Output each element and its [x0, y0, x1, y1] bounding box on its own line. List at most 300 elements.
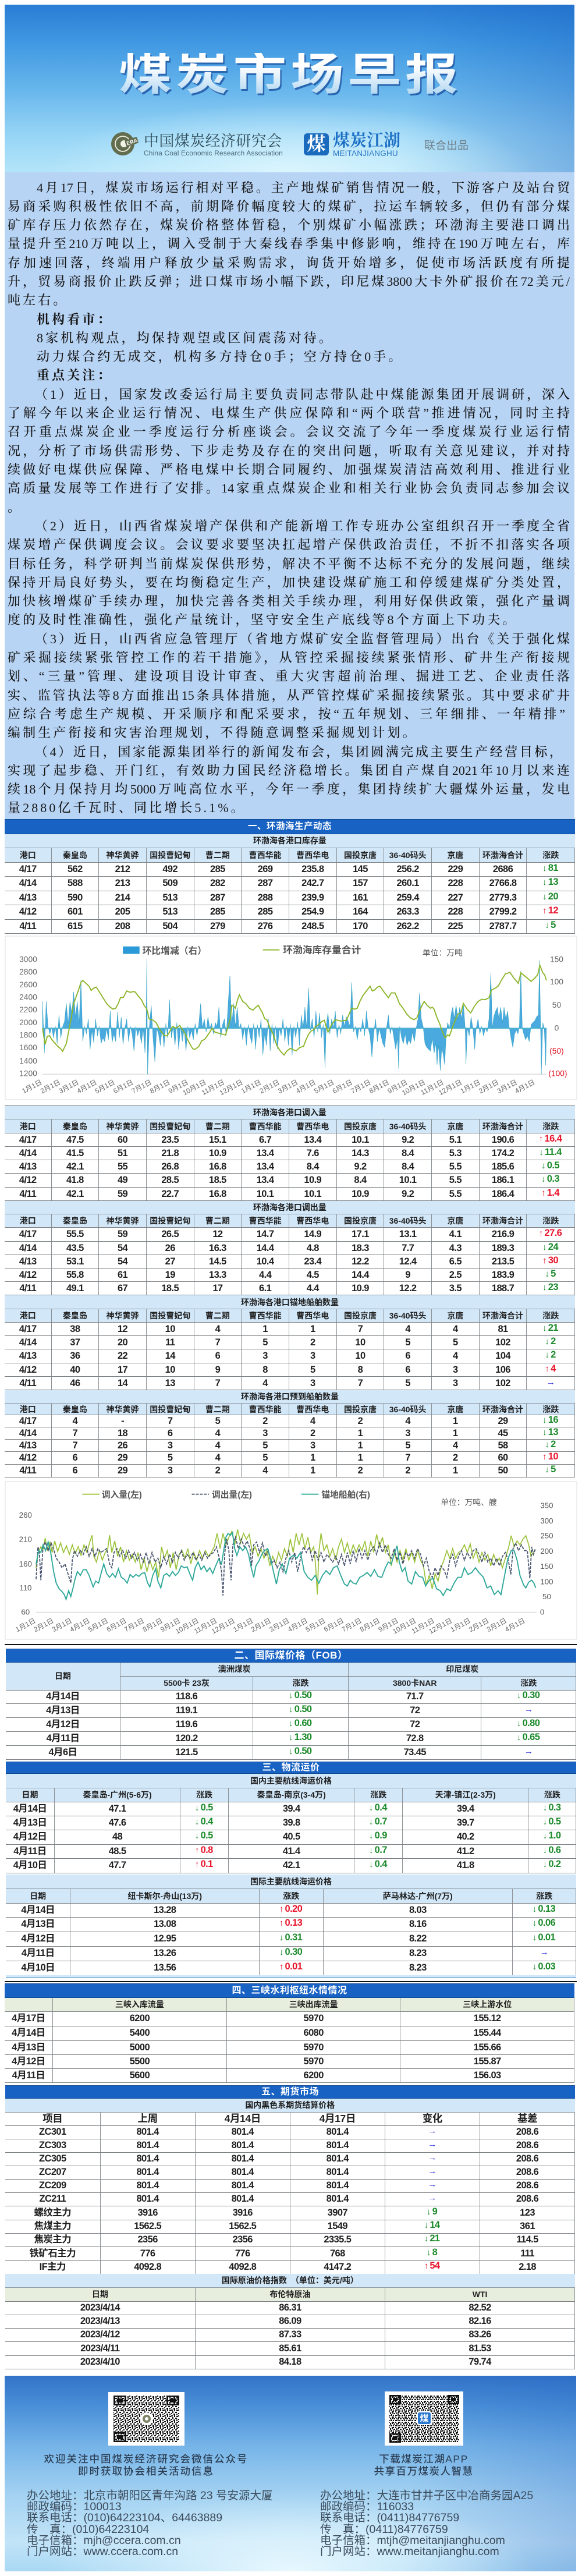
table: port flows and vessels: 13: [165, 1378, 175, 1388]
chart axes labels: 100: [540, 1577, 553, 1586]
organisation name: China Coal Economic Research Association: [144, 149, 283, 157]
table: international shipping prices: 12.95: [154, 1933, 176, 1944]
table: black-series futures: 9: [432, 2206, 437, 2217]
table: Three Gorges data: 5600: [130, 2070, 150, 2081]
table: port flows and vessels: 8.4: [354, 1175, 367, 1185]
table: port inventory: 环渤海合计: [482, 850, 523, 859]
table: port flows and vessels: 9: [215, 1365, 220, 1375]
text block: item 1: 。: [8, 500, 20, 515]
table: port flows and vessels: 0.3: [547, 1174, 559, 1184]
table: port flows and vessels: 4/14: [19, 1337, 37, 1348]
table: port flows and vessels: 4: [262, 1378, 268, 1388]
table: port flows and vessels: 2: [310, 1337, 315, 1348]
table: port inventory: 242.7: [301, 878, 324, 888]
table: port flows and vessels: ↑: [545, 1364, 549, 1374]
chart x axis months: 4月1日: [76, 1078, 98, 1095]
table: port flows and vessels: 3: [310, 1351, 315, 1361]
table: international shipping prices: 8.22: [409, 1933, 427, 1944]
table: port flows and vessels: 30: [548, 1255, 558, 1266]
table: port flows and vessels: 4: [405, 1416, 410, 1426]
text block: item 1: [8, 387, 570, 515]
table: port flows and vessels: 曹西华电: [296, 1121, 329, 1131]
table: black-series futures: 上周: [138, 2113, 158, 2124]
chart legend: [82, 1490, 497, 1507]
table: port flows and vessels: 4: [551, 1363, 556, 1374]
chart x axis months: 4月1日: [286, 1617, 309, 1634]
chart x axis months: 6月1日: [112, 1078, 134, 1095]
table: port inventory: 227: [448, 892, 463, 903]
table: port flows and vessels: 10.1: [352, 1135, 369, 1145]
table: crude oil index: 86.09: [279, 2316, 301, 2326]
table: FOB prices: 1.30: [294, 1732, 311, 1742]
table: port inventory: 214: [115, 892, 130, 903]
table: FOB prices: 119.1: [176, 1705, 197, 1716]
text block: item 1: 高质量发展等工作进行了安排。14家重点煤炭企业和相关行业协会负责同志参加会议: [8, 481, 570, 495]
table: domestic shipping prices: 0.7: [375, 1816, 387, 1827]
chart plot: [42, 958, 546, 1074]
table: FOB prices: 4月13日: [46, 1705, 80, 1716]
table: port flows and vessels: 189.3: [492, 1243, 514, 1253]
table: port flows and vessels: 10.1: [304, 1189, 321, 1199]
table: port flows and vessels: 26: [118, 1440, 127, 1451]
table: port flows and vessels: 104: [495, 1351, 510, 1361]
table: international shipping prices: →: [540, 1947, 549, 1957]
table: port flows and vessels: 曹二期: [205, 1311, 230, 1320]
table: port flows and vessels: 2: [551, 1336, 556, 1347]
table: port flows and vessels: 曹西华能: [249, 1404, 282, 1413]
table: domestic shipping prices: 0.4: [201, 1816, 213, 1827]
table: port flows and vessels: 5: [262, 1440, 268, 1451]
table: black-series futures: 3916: [137, 2208, 158, 2218]
table: port inventory: 涨跌: [542, 850, 559, 859]
chart x axis months: 3月1日: [51, 1617, 73, 1634]
table: port inventory: 曹西华能: [249, 850, 282, 859]
table: port flows and vessels: 1: [262, 1324, 268, 1334]
text block: CCERA contact details: 联系电话：(010)64223104、64463889: [27, 2511, 222, 2524]
text block: item 2: [8, 519, 570, 627]
table: port flows and vessels: 3: [310, 1440, 315, 1451]
table: port inventory: 276: [258, 921, 272, 931]
table: port flows and vessels: 神华黄骅: [107, 1121, 139, 1131]
table: port flows and vessels: 4/12: [19, 1452, 37, 1463]
text block: market overview: 升，贸易商报价止跌反弹；进口煤市场小幅下跌，印尼煤3800大卡外矿报价在72美元/: [8, 274, 570, 289]
table: port flows and vessels: 26.8: [161, 1161, 179, 1172]
table: Three Gorges data: 5970: [304, 2013, 324, 2024]
table: port flows and vessels: 曹西华能: [249, 1311, 282, 1320]
table: port flows and vessels: 5.5: [449, 1161, 462, 1172]
chart x axis months: 3月1日: [268, 1617, 290, 1634]
table: port flows and vessels: 4: [453, 1440, 458, 1451]
table: port inventory: 205: [115, 906, 130, 917]
table: port flows and vessels: 10: [165, 1365, 175, 1375]
table: black-series futures: 776: [235, 2248, 250, 2259]
section heading: futures market: 五、期货市场: [261, 2087, 319, 2097]
table: domestic shipping prices: 国内主要航线海运价格: [250, 1776, 332, 1785]
table: port flows and vessels: 55: [118, 1161, 127, 1172]
text block: item 3: （3）近日，山西省应急管理厅（省地方煤矿安全监督管理局）出台《关于强化煤: [35, 632, 570, 646]
table: port flows and vessels: 5: [405, 1337, 410, 1348]
chart axes labels: 50: [542, 1592, 551, 1601]
table: port inventory: 248.5: [301, 921, 324, 931]
table: black-series futures: 2356: [137, 2234, 158, 2245]
table: port flows and vessels: 秦皇岛: [63, 1216, 87, 1225]
table: domestic shipping prices: 涨跌: [370, 1790, 386, 1799]
table: port flows and vessels: 58: [498, 1440, 508, 1451]
table: port inventory: 161: [353, 892, 368, 903]
table: port flows and vessels: 185.6: [492, 1161, 514, 1172]
table: domestic shipping prices: 39.4: [457, 1803, 474, 1814]
text block: CCERA contact details: 门户网站：www.ccera.com.cn: [27, 2545, 178, 2558]
chart x axis months: 4月1日: [69, 1617, 91, 1634]
table: port flows and vessels: 4: [215, 1428, 220, 1438]
table: port flows and vessels: 5.1: [449, 1135, 462, 1145]
table: crude oil index: 83.26: [469, 2329, 491, 2340]
table: port flows and vessels: 14: [165, 1351, 175, 1361]
chart x axis months: 9月1日: [386, 1078, 409, 1095]
table: domestic shipping prices: 48: [112, 1831, 122, 1842]
table: international shipping prices: 0.30: [285, 1947, 302, 1957]
table: international shipping prices: 0.31: [285, 1932, 302, 1943]
table: domestic shipping prices: ↓: [543, 1859, 547, 1869]
table: port flows and vessels: 10.1: [257, 1189, 274, 1199]
table: FOB prices: 5500卡 23灰: [164, 1678, 210, 1688]
table: port flows and vessels: 4/14: [19, 1148, 37, 1158]
chart x axis months: 9月1日: [167, 1078, 190, 1095]
table: black-series futures: 208.6: [516, 2140, 538, 2150]
table: international shipping prices: 0.01: [285, 1961, 302, 1972]
table: port flows and vessels: 29: [118, 1465, 127, 1476]
table: port inventory: 2799.2: [489, 906, 516, 917]
table: black-series futures: 208.6: [516, 2127, 538, 2137]
chart x axis months: 3月1日: [496, 1078, 519, 1095]
table: port flows and vessels: 36-40码头: [389, 1311, 427, 1320]
table: port flows and vessels: 12: [118, 1324, 127, 1334]
table: domestic shipping prices: 0.6: [548, 1845, 560, 1855]
chart axes labels: 1800: [19, 1031, 37, 1040]
table: port inventory: 259.4: [397, 892, 419, 903]
chart legend: [123, 944, 463, 958]
chart x axis months: 1月1日: [20, 1078, 44, 1095]
footer panel: [5, 2376, 576, 2571]
table: black-series futures: 801.4: [327, 2153, 349, 2164]
table: port inventory: 492: [162, 864, 178, 874]
table: FOB prices: 澳洲煤炭: [218, 1664, 250, 1674]
table: black-series futures: ZC207: [39, 2167, 66, 2177]
table: port flows and vessels: 14: [118, 1378, 127, 1388]
table: port flows and vessels: 36-40码头: [389, 1121, 427, 1131]
table: port flows and vessels: 49: [118, 1175, 127, 1185]
text block: item 4: 实现了起步稳、开门红，有效助力国民经济稳增长。集团自产煤自2021年10月以来连: [8, 763, 570, 778]
chart axes labels: 160: [19, 1560, 32, 1568]
table: port flows and vessels: 2: [310, 1428, 315, 1438]
section heading: logistics freight: [6, 1762, 576, 1774]
table: black-series futures: 801.4: [232, 2127, 254, 2137]
table: port flows and vessels: 京唐: [447, 1121, 463, 1131]
table: port flows and vessels: 港口: [20, 1121, 36, 1131]
table: international shipping prices: 13.28: [154, 1905, 176, 1915]
table: domestic shipping prices: 41.8: [457, 1860, 474, 1870]
table: international shipping prices: 8.23: [409, 1962, 427, 1973]
table: port flows and vessels: ↓: [542, 1415, 547, 1425]
text block: market overview: 矿库存压力依然存在，煤炭价格整体暂稳，个别煤矿小幅涨跌；环渤海主要港口调出: [8, 218, 570, 232]
table: port flows and vessels: 7: [73, 1428, 77, 1438]
chart axes labels: (100): [548, 1069, 567, 1078]
chart x axis months: 5月1日: [94, 1078, 116, 1095]
table: black-series futures: 801.4: [327, 2180, 349, 2191]
table: port flows and vessels: 3: [453, 1365, 458, 1375]
table: black-series futures: 4092.8: [134, 2262, 161, 2272]
chart x axis months: 4月1日: [513, 1078, 536, 1095]
table: domestic shipping prices: ↓: [543, 1817, 547, 1827]
table: port flows and vessels: 3: [262, 1428, 268, 1438]
chart x axis months: 10月1日: [400, 1078, 427, 1097]
text block: item 2: 保持开局良好势头，要在均衡稳定生产，加快建设煤矿施工和停缓建煤矿分类处置，: [8, 575, 570, 590]
table: international shipping prices: 国际主要航线海运价格: [250, 1877, 332, 1886]
table: domestic shipping prices: 秦皇岛-南京(3-4万): [257, 1790, 326, 1799]
QR code: app download: [385, 2391, 463, 2446]
chart x axis months: 8月1日: [368, 1078, 391, 1095]
table: black-series futures: 114.5: [516, 2234, 538, 2245]
table: port flows and vessels: 京唐: [447, 1216, 463, 1225]
table: port flows and vessels: 188.7: [492, 1283, 514, 1294]
table: port inventory: 285: [258, 906, 272, 917]
chart x axis months: 11月1日: [410, 1617, 436, 1635]
table: port flows and vessels: 曹西华电: [296, 1216, 329, 1225]
table: international shipping prices: 13.56: [154, 1962, 176, 1973]
section heading: futures market: [5, 2085, 575, 2099]
table: international shipping prices: 涨跌: [283, 1891, 299, 1900]
table: port flows and vessels: 102: [495, 1337, 510, 1348]
table: port flows and vessels: 7: [358, 1324, 363, 1334]
table: port inventory: 225: [448, 921, 463, 931]
table: port flows and vessels: 曹二期: [205, 1404, 230, 1413]
table: port flows and vessels: 曹二期: [205, 1216, 230, 1225]
table: port flows and vessels: 1: [358, 1440, 363, 1451]
organisation name: 中国煤炭经济研究会: [144, 133, 282, 150]
table: port flows and vessels: 17: [212, 1283, 222, 1294]
table: port flows and vessels: 14.9: [304, 1229, 321, 1239]
table: port flows and vessels: 4/11: [19, 1189, 36, 1199]
chart x axis months: 8月1日: [359, 1617, 381, 1634]
chart x axis months: 8月1日: [148, 1078, 171, 1095]
chart x axis months: 1月1日: [14, 1617, 37, 1634]
table: port flows and vessels: 5.3: [449, 1148, 462, 1158]
table: port flows and vessels: 曹西华能: [249, 1121, 282, 1131]
table: port flows and vessels: 4/11: [19, 1283, 36, 1294]
chart axes labels: 2600: [19, 980, 37, 989]
chart x axis months: [14, 1617, 526, 1635]
table: port flows and vessels: 46: [70, 1378, 80, 1388]
table: port flows and vessels: 5: [310, 1365, 315, 1375]
table: international shipping prices: 4月12日: [21, 1933, 55, 1944]
table: port flows and vessels: ↑: [539, 1134, 543, 1144]
table: domestic shipping prices: 0.5: [201, 1830, 213, 1841]
chart x axis months: 2月1日: [32, 1617, 55, 1634]
table: Three Gorges data: 4月11日: [12, 2070, 45, 2081]
table: port flows and vessels: 6.5: [449, 1256, 462, 1267]
table: domestic shipping prices: ↑: [195, 1845, 199, 1855]
text block: item 4: 量2880亿千瓦时、同比增长5.1%。: [8, 800, 246, 815]
table: port flows and vessels: 4.1: [449, 1229, 462, 1239]
table: port flows and vessels: 神华黄骅: [107, 1216, 139, 1225]
chart x axis months: 11月1日: [420, 1078, 445, 1097]
text block: institutions view: [37, 312, 404, 382]
table: domestic shipping prices: ↓: [195, 1803, 199, 1813]
text block: CCERA contact details: 电子信箱：mjh@ccera.com.cn: [27, 2534, 181, 2547]
icon: Meitanjianghu logo: 煤: [307, 133, 326, 154]
table: black-series futures: →: [428, 2193, 436, 2203]
table: port inventory: ↓: [542, 892, 547, 902]
table: international shipping prices: ↓: [533, 1933, 537, 1943]
text block: Meitanjianghu contact details: 办公地址：大连市甘井子区中冶商务园A25: [320, 2489, 533, 2502]
table: Three Gorges data: 4月14日: [12, 2028, 45, 2038]
table: port inventory: 601: [68, 906, 83, 917]
table: port flows and vessels: 4: [453, 1324, 458, 1334]
table: domestic shipping prices: 天津-镇江(2-3万): [435, 1790, 496, 1799]
chart axes labels: 0: [540, 1608, 544, 1617]
table: domestic shipping prices: 0.9: [375, 1830, 387, 1841]
table: domestic shipping prices: 0.5: [548, 1816, 560, 1827]
table: port flows and vessels: 2: [405, 1465, 410, 1476]
table: port flows and vessels: 4/12: [19, 1175, 37, 1185]
table: Three Gorges data: 5970: [304, 2042, 324, 2053]
table: FOB prices: 4月12日: [46, 1719, 80, 1730]
QR code: app download: 煤: [420, 2414, 429, 2423]
table: port flows and vessels: 15.1: [209, 1135, 226, 1145]
table: port flows and vessels: 13.4: [257, 1175, 274, 1185]
table: port inventory: 212: [115, 864, 130, 874]
chart plot: [36, 1529, 537, 1613]
table: port flows and vessels: 10.9: [352, 1283, 369, 1294]
table: port flows and vessels: 4.4: [307, 1283, 319, 1294]
table: port flows and vessels: 3: [262, 1351, 268, 1361]
table: domestic shipping prices: 4月14日: [13, 1803, 47, 1814]
table: port flows and vessels: 186.1: [492, 1175, 514, 1185]
table: black-series futures: [5, 2099, 575, 2274]
table: black-series futures: 801.4: [136, 2180, 159, 2191]
table: port flows and vessels: 4: [310, 1416, 315, 1426]
table: port flows and vessels: 3: [405, 1428, 410, 1438]
table: FOB prices: ↓: [289, 1732, 293, 1742]
text block: app invitation: [374, 2453, 474, 2477]
table: crude oil index: 2023/4/11: [80, 2343, 119, 2354]
chart x axis months: 6月1日: [322, 1617, 345, 1634]
table: crude oil index: 82.52: [469, 2302, 491, 2313]
table: FOB prices: ↓: [517, 1718, 521, 1728]
chart x axis months: 6月1日: [331, 1078, 354, 1095]
table: black-series futures: 801.4: [232, 2140, 254, 2150]
table: port flows and vessels: 4: [453, 1351, 458, 1361]
table: port flows and vessels: 国投曹妃甸: [150, 1121, 190, 1131]
chart axes labels: 210: [19, 1535, 32, 1543]
table: port flows and vessels: 6: [405, 1365, 410, 1375]
text block: WeChat invitation: 即时获取协会相关活动信息: [78, 2465, 214, 2477]
table: port flows and vessels: 2: [262, 1416, 268, 1426]
table: port flows and vessels: 4: [215, 1440, 220, 1451]
table: crude oil index: 86.31: [279, 2302, 301, 2313]
table: domestic shipping prices: ↓: [195, 1817, 199, 1827]
text block: item 3: 编制生产衔接和灾害治理规划，不得随意调整采掘规划计划。: [8, 725, 418, 740]
table: FOB prices: 涨跌: [520, 1678, 537, 1688]
chart x axis months: 2月1日: [39, 1078, 62, 1095]
table: international shipping prices: 0.01: [538, 1932, 555, 1943]
table: port inventory: 504: [162, 921, 178, 931]
table: port flows and vessels: 6: [405, 1351, 410, 1361]
table: port inventory: 562: [68, 864, 83, 874]
table: black-series futures: 768: [330, 2248, 345, 2259]
table: crude oil index: 79.74: [469, 2357, 491, 2367]
chart legend: 环比增减（右）: [143, 946, 207, 956]
table: port flows and vessels: 6: [73, 1465, 77, 1476]
table: port flows and vessels: 26: [165, 1243, 175, 1253]
text block: Meitanjianghu contact details: 联系电话：(0411)84776759: [320, 2511, 459, 2524]
text block: item 2: 目标任务，科学研判当前煤炭保供形势，解决不平衡不达标不充分的发展问题，继续: [8, 557, 570, 571]
table: port flows and vessels: 10.9: [304, 1175, 321, 1185]
table: domestic shipping prices: 0.1: [201, 1859, 213, 1869]
chart x axis months: 12月1日: [437, 1078, 463, 1097]
table: international shipping prices: 8.03: [409, 1905, 427, 1915]
table: port flows and vessels: 环渤海各港口锚地船舶数量: [241, 1297, 339, 1306]
text block: item 1: 召开重点煤炭企业一季度运行分析座谈会。会议交流了今年一季度煤炭行业运行情: [8, 424, 570, 439]
table: port flows and vessels: 4/14: [19, 1428, 37, 1438]
table: black-series futures: 焦炭主力: [34, 2234, 71, 2245]
table: crude oil index: 81.53: [469, 2343, 491, 2354]
table: port inventory: 287: [258, 878, 272, 888]
text block: item 4: （4）近日，国家能源集团举行的新闻发布会，集团圆满完成主要生产经营目标，: [35, 744, 562, 759]
table: port flows and vessels: 1.4: [547, 1188, 559, 1198]
table: port flows and vessels: 神华黄骅: [107, 1311, 139, 1320]
chart x axis months: 5月1日: [313, 1078, 335, 1095]
table: black-series futures: 208.6: [516, 2180, 538, 2191]
table: FOB prices: 73.45: [404, 1747, 426, 1758]
table: port inventory: ↓: [545, 920, 549, 930]
table: black-series futures: 2335.5: [324, 2234, 351, 2245]
table: domestic shipping prices: 0.2: [548, 1859, 560, 1869]
table: Three Gorges data: 5400: [130, 2028, 150, 2038]
table: port flows and vessels: ↓: [545, 1337, 549, 1347]
table: port flows and vessels: 10.9: [352, 1189, 369, 1199]
table: port flows and vessels: 6.1: [259, 1283, 271, 1294]
table: international shipping prices: 8.16: [409, 1919, 427, 1929]
chart axes labels: 250: [540, 1532, 553, 1540]
table: domestic shipping prices: 日期: [22, 1790, 38, 1799]
table: port flows and vessels: 41.8: [66, 1175, 84, 1185]
table: port inventory: 4/12: [19, 906, 37, 917]
table: port flows and vessels: 2.5: [449, 1270, 462, 1280]
table: crude oil index: WTI: [473, 2290, 487, 2299]
chart x axis months: 4月1日: [294, 1078, 317, 1095]
table: black-series futures: 21: [430, 2233, 440, 2244]
table: international shipping prices: ↓: [279, 1933, 283, 1943]
chart x axis months: 3月1日: [485, 1617, 508, 1634]
table: port flows and vessels: 11: [165, 1337, 175, 1348]
table: international shipping prices: ↑: [279, 1962, 283, 1972]
text block: item 1: （1）近日，国家发改委运行局主要负责同志带队赴中煤能源集团开展调研，深入: [35, 387, 570, 402]
table: black-series futures: 801.4: [327, 2167, 349, 2177]
table: port inventory: 145: [353, 864, 368, 874]
table: port inventory: 157: [353, 878, 368, 888]
chart axes labels: 2200: [19, 1005, 37, 1014]
table: port flows and vessels: 1: [358, 1452, 363, 1463]
text block: Meitanjianghu contact details: 电子信箱：mtjh@meitanjianghu.com: [320, 2534, 505, 2547]
table: port flows and vessels: 14.4: [352, 1270, 369, 1280]
panel: market commentary: [5, 172, 574, 819]
table: port flows and vessels: 5: [453, 1337, 458, 1348]
table: port flows and vessels: 9.2: [402, 1135, 414, 1145]
table: black-series futures: 3916: [233, 2208, 253, 2218]
table: port inventory: ↓: [542, 863, 547, 873]
table: port flows and vessels: 27.6: [545, 1228, 562, 1238]
